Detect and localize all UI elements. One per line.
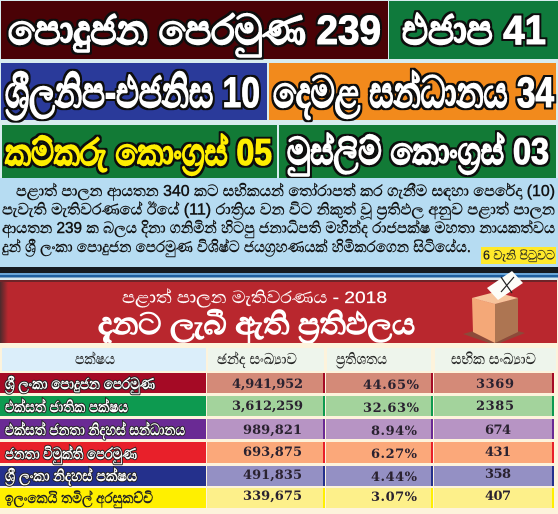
table header [2, 348, 556, 371]
panel: results table [0, 343, 558, 514]
row: JVP: 693,875 [243, 445, 302, 460]
text block: summary paragraph [0, 178, 558, 267]
banner: Podujana Peramuna 239: පොදුජන පෙරමුණ 239 [8, 7, 381, 58]
banner: SLFP-UPFA 10: ශ්‍රීලනිප-එජනිස 10 [5, 69, 260, 120]
text block: summary paragraph: පැවැති මැතිවරණයේ ඊයේ (11) රාත්‍රිය වන විට නිකුත් වූ ප්‍රතිඵල අනුව පළාත් පාලන [2, 200, 555, 220]
row: SLFP: ශ්‍රී ලංකා නිදහස් පක්ෂය [4, 467, 138, 487]
callout: continued on page 6: 6 වැනි පිටුවට [483, 248, 555, 262]
row: SLPP: 44.65% [363, 378, 420, 393]
row: JVP [0, 442, 554, 465]
row: ITAK [0, 488, 554, 509]
row: UPFA [0, 419, 554, 440]
table header: පක්ෂය [75, 350, 115, 368]
row: SLFP [0, 466, 554, 487]
text block: summary paragraph: ආයතන 239 ක බලය දිනා ගනිමින් හිටපු ජනාධිපති මහින්ද රාජපක්ෂ මහතා නායකත්වය [2, 219, 555, 238]
row: UNP: 32.63% [363, 401, 420, 416]
row: UPFA: 674 [485, 423, 511, 438]
banner heading: දැනට ලැබී ඇති ප්‍රතිඵලය [98, 308, 415, 344]
row: ITAK: 3.07% [371, 490, 418, 505]
icon: ballot box [463, 271, 525, 345]
banner: Workers Congress 05 [2, 125, 277, 178]
row: SLFP: 4.44% [371, 470, 418, 485]
banner subtitle: පළාත් පාලන මැතිවරණය - 2018 [122, 288, 387, 308]
row: JVP: ජනතා විමුක්ති පෙරමුණ [5, 445, 137, 465]
row: UPFA: එක්සත් ජනතා නිදහස් සන්ධානය [5, 421, 186, 440]
banner: Workers Congress 05: කම්කරු කොංග්‍රස් 05 [5, 132, 272, 177]
row: ITAK: 339,675 [243, 489, 302, 504]
text block: summary paragraph: දුන් ශ්‍රී ලංකා පොදුජන පෙරමුණ විශිෂ්ට ජයග්‍රහණයක් හිමිකරගෙන සිටියේය. [2, 238, 471, 257]
row: UNP: එක්සත් ජාතික පක්ෂය [5, 398, 129, 416]
row: ITAK: ඉලංකෙයි තමිල් අරසුකච්චි [5, 489, 153, 509]
row: SLPP: 3369 [476, 377, 514, 392]
row: SLPP: 4,941,952 [232, 377, 303, 392]
row: SLFP: 491,835 [243, 468, 302, 483]
row: UPFA: 989,821 [243, 423, 302, 438]
row: UNP [0, 396, 554, 416]
table header: ඡන්ද සංඛ්‍යාව [217, 350, 297, 368]
row: ITAK: 407 [485, 489, 511, 504]
row: JVP: 431 [485, 445, 511, 460]
row: SLPP: ශ්‍රී ලංකා පොදුජන පෙරමුණ [4, 375, 156, 395]
row: UPFA: 8.94% [371, 424, 418, 439]
row: UNP: 2385 [476, 399, 514, 414]
row: JVP: 6.27% [371, 447, 418, 462]
panel: results banner [0, 280, 557, 344]
banner: SLFP-UPFA 10 [1, 63, 267, 120]
row: SLFP: 358 [485, 467, 511, 482]
text block: summary paragraph: පළාත් පාලන ආයතන 340 කට සභිකයන් තෝරාපත් කර ගැනීම සඳහා පෙරේදා (10) [16, 182, 555, 201]
table header: සභික සංඛ්‍යාව [451, 351, 536, 368]
row: UNP: 3,612,259 [232, 399, 303, 414]
row: SLPP [0, 373, 554, 395]
banner: UNP 41: එජාප 41 [402, 7, 546, 53]
table header: ප්‍රතිශතය [336, 351, 387, 369]
